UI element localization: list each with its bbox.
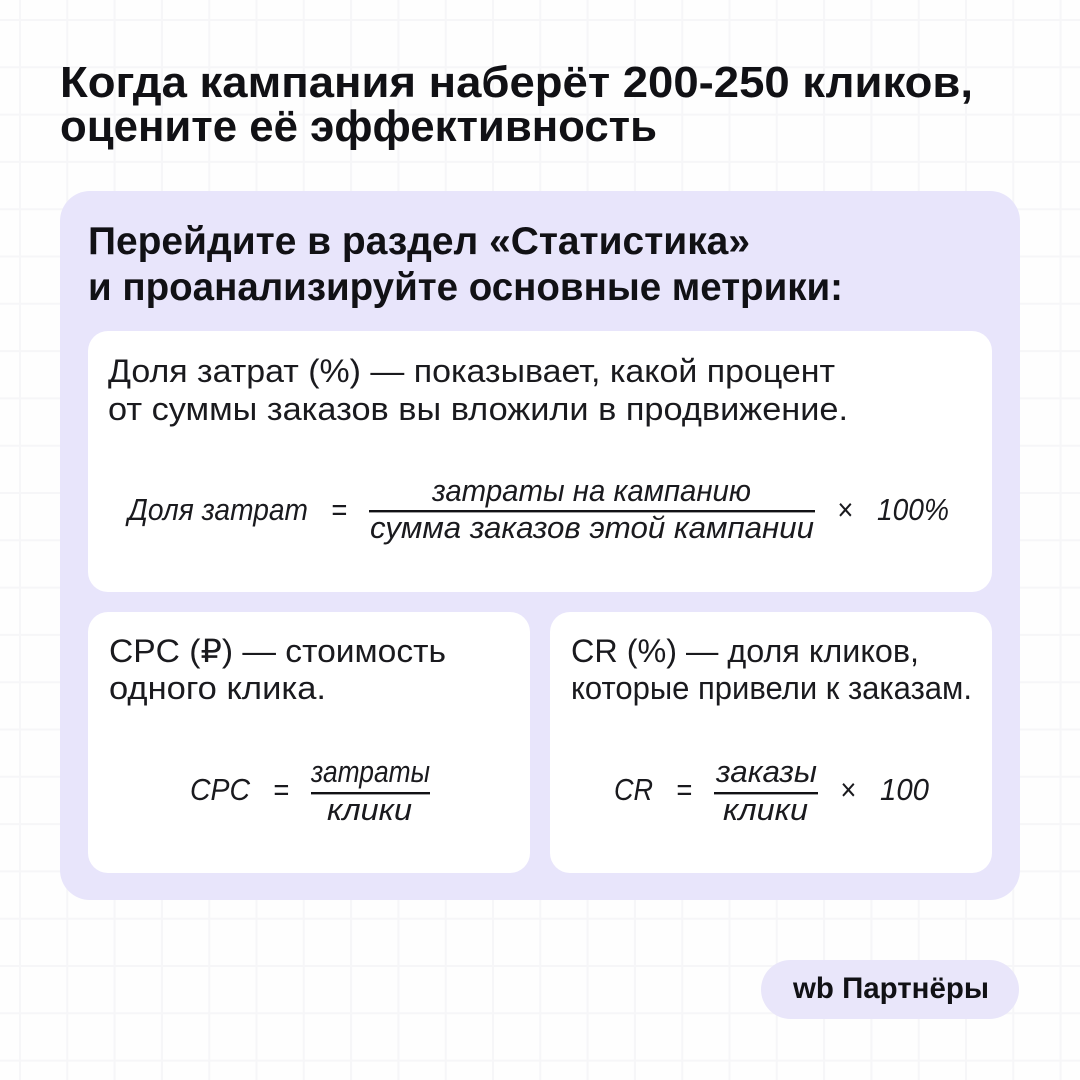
CR formula: × [840,772,856,807]
CR description [571,633,972,706]
CPC formula: клики [327,792,412,827]
CR formula: 100 [880,772,929,807]
CR formula: заказы [715,754,817,789]
logo pill [761,960,1019,1019]
panel heading: и проанализируйте основные метрики: [88,266,843,309]
CR formula: CR [614,772,653,807]
panel: metrics [60,191,1020,900]
logo pill: wb Партнёры [792,972,989,1005]
CPC description: CPC (₽) — стоимость [109,633,446,669]
CR description: которые привели к заказам. [571,670,972,706]
CR formula: клики [723,792,808,827]
cost share description [108,353,848,427]
panel heading [88,220,843,309]
CPC description [109,633,446,706]
cost share formula: затраты на кампанию [431,473,751,508]
title [60,58,973,151]
card: cost share [88,331,992,592]
CPC description: одного клика. [109,670,326,706]
cost share formula: = [331,492,347,527]
CPC formula: CPC [190,772,251,807]
CR formula: = [676,772,692,807]
title: оцените её эффективность [60,102,657,151]
cost share formula: 100% [877,492,949,527]
cost share formula: × [837,492,853,527]
CPC formula: затраты [310,754,430,789]
CPC formula [190,754,430,827]
CPC formula: = [273,772,289,807]
cost share description: от суммы заказов вы вложили в продвижение. [108,391,848,427]
panel heading: Перейдите в раздел «Статистика» [88,220,750,263]
cost share description: Доля затрат (%) — показывает, какой процент [108,353,835,389]
cost share formula: Доля затрат [125,492,308,527]
card: CR [550,612,992,873]
title: Когда кампания наберёт 200-250 кликов, [60,58,973,107]
cost share formula [125,473,949,545]
cost share formula: сумма заказов этой кампании [370,510,814,545]
CR description: CR (%) — доля кликов, [571,633,919,669]
card: CPC [88,612,530,873]
CR formula [614,754,929,827]
